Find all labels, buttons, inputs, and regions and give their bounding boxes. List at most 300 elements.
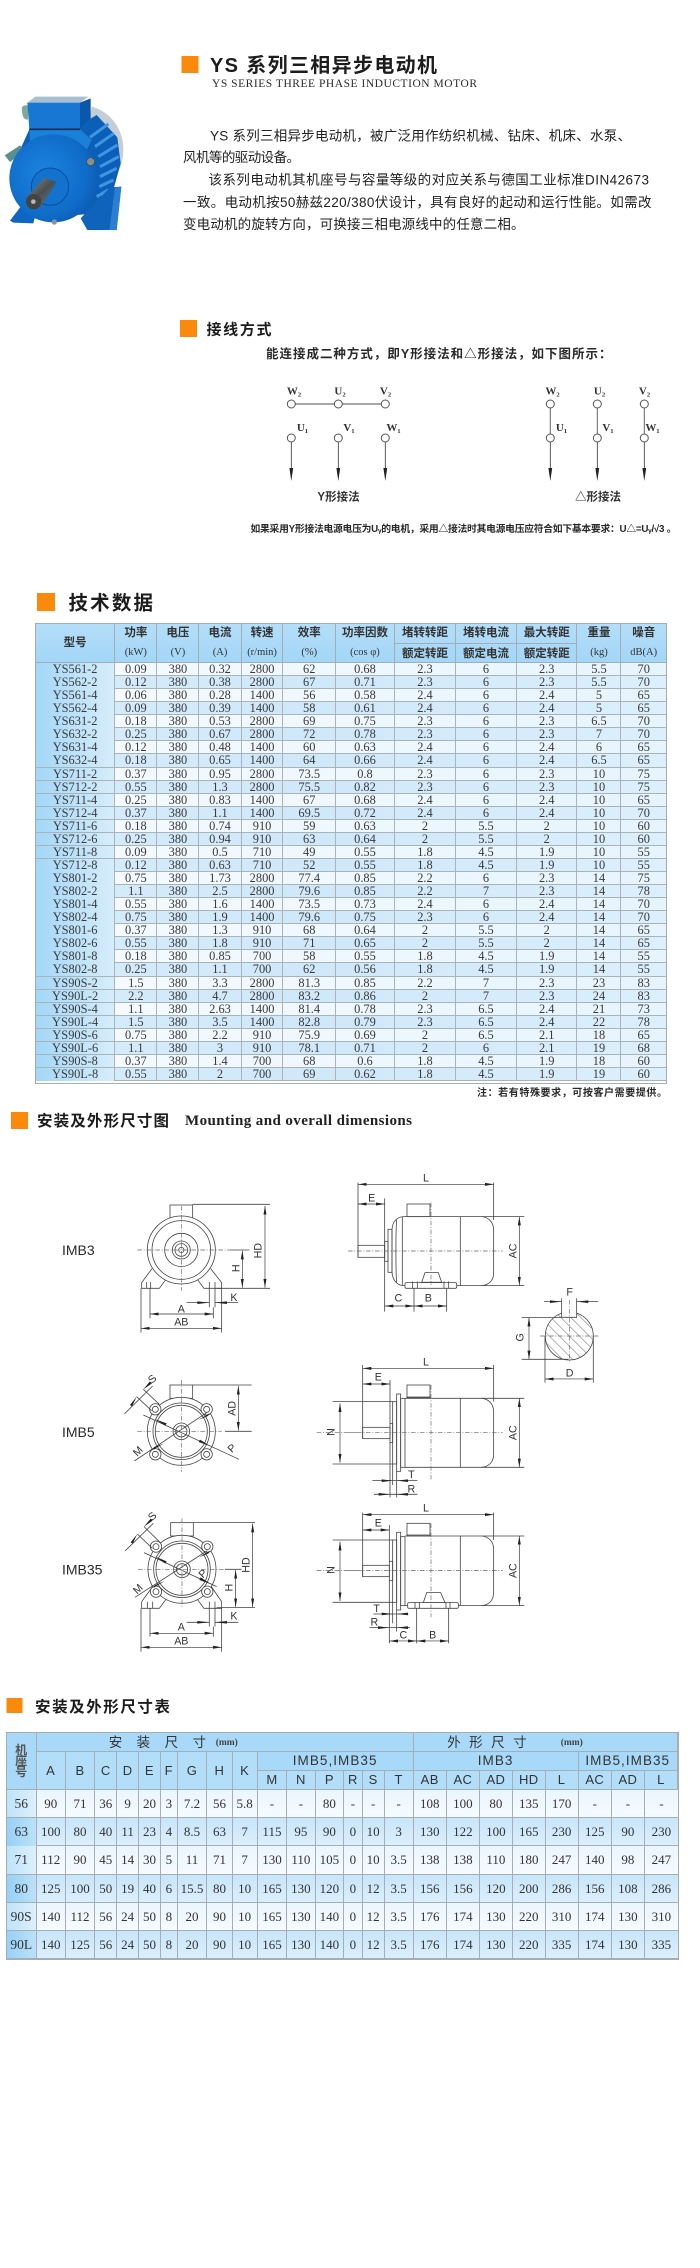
table rows: 6 (483, 701, 489, 715)
table rows: 14 (593, 923, 605, 937)
table rows: 20 (185, 1937, 198, 1952)
drawing: IMB3 side view: AC (507, 1243, 519, 1258)
table rows: 0.78 (354, 1002, 376, 1016)
table rows: 2.3 (539, 871, 554, 885)
table rows: 7 (483, 989, 489, 1003)
table header: C (101, 1763, 111, 1778)
table rows: 1.8 (417, 858, 433, 872)
table rows: 286 (552, 1881, 571, 1896)
table rows: 3 (395, 1824, 402, 1839)
table rows: 700 (253, 1067, 271, 1081)
header text: installation size: 安装尺寸 (109, 1735, 221, 1750)
table: mounting and overall sizes (6, 1732, 679, 1960)
table rows: 65 (638, 1028, 650, 1042)
table rows: 2.2 (417, 884, 433, 898)
table header: H (215, 1763, 224, 1778)
table rows: - (299, 1796, 303, 1811)
table rows: 4 (166, 1824, 172, 1839)
table rows: 75.9 (298, 1028, 320, 1042)
table rows: 1.8 (212, 936, 228, 950)
table rows: 14 (593, 897, 605, 911)
table rows: - (371, 1796, 375, 1811)
table header: AB (421, 1772, 439, 1787)
table rows: 156 (420, 1881, 440, 1896)
table rows: 10 (593, 845, 605, 859)
table rows: 56 (213, 1796, 226, 1811)
table rows: 200 (519, 1881, 538, 1896)
table rows: 380 (169, 806, 187, 820)
table rows (36, 662, 666, 1081)
drawing: IMB5 side view: N (326, 1428, 338, 1436)
table rows: 0.67 (209, 727, 231, 741)
table header: K (240, 1763, 249, 1778)
table rows: 4.5 (478, 962, 494, 976)
table rows: 73 (638, 1002, 650, 1016)
table rows: 56 (14, 1796, 28, 1811)
table rows: 1400 (250, 1002, 274, 1016)
table rows: YS562-2 (53, 675, 97, 689)
table rows: 0.6 (357, 1054, 373, 1068)
table rows: 0.32 (209, 662, 231, 676)
table rows: 40 (99, 1824, 112, 1839)
table rows: 6 (483, 753, 489, 767)
table header: (%) (301, 647, 317, 658)
table rows: 2.3 (417, 675, 433, 689)
drawing: IMB3 front view: HD (252, 1243, 264, 1258)
table rows: 80 (489, 1796, 502, 1811)
table rows: 6.5 (478, 1002, 494, 1016)
table header: E (145, 1763, 154, 1778)
table rows: 2.4 (417, 740, 433, 754)
table rows: YS712-4 (53, 806, 97, 820)
table rows: 2.4 (539, 740, 554, 754)
table rows: 24 (121, 1909, 134, 1924)
diagram: Y connection: Y形接法 (317, 490, 360, 504)
table rows: 90S (11, 1909, 32, 1924)
table rows: 2.3 (539, 766, 554, 780)
drawing: IMB35 front view: AB (174, 1636, 188, 1648)
table rows: 1.8 (417, 1054, 433, 1068)
table rows: 380 (169, 832, 187, 846)
table header: AC (585, 1772, 604, 1787)
table rows: 2 (544, 832, 550, 846)
table rows: 14 (593, 884, 605, 898)
table rows: 0.63 (354, 740, 376, 754)
drawing: IMB35 front view: IMB35 (62, 1561, 103, 1577)
table rows: 0.25 (125, 793, 147, 807)
table header: 座 (15, 1754, 27, 1768)
table rows: 0.85 (354, 871, 376, 885)
table rows: 174 (585, 1909, 604, 1924)
table rows: 380 (169, 923, 187, 937)
table rows: 2.3 (539, 714, 554, 728)
table rows: 22 (593, 1015, 605, 1029)
table rows: YS712-2 (53, 780, 97, 794)
table rows: 70 (638, 662, 650, 676)
table rows: 83 (638, 976, 650, 990)
table rows: 1400 (250, 910, 274, 924)
table header: 重量 (587, 627, 610, 639)
table rows: 80 (323, 1796, 336, 1811)
table rows: 14 (593, 962, 605, 976)
drawing: IMB35 side view: R (370, 1617, 378, 1629)
table rows: 1.3 (212, 780, 228, 794)
table rows: 0.12 (125, 740, 147, 754)
table rows: 174 (453, 1937, 473, 1952)
diagram: Y connection: W₁ (386, 422, 401, 434)
table header: S (369, 1772, 378, 1787)
table header: 堵转转距 (402, 627, 448, 639)
table rows: YS801-8 (53, 949, 97, 963)
table rows: 8.5 (184, 1824, 200, 1839)
table rows: 21 (593, 1002, 605, 1016)
table rows: 0.18 (125, 714, 147, 728)
table rows: YS90S-4 (52, 1002, 98, 1016)
table rows: 2.3 (417, 727, 433, 741)
table rows: 14 (121, 1852, 134, 1867)
table rows: 58 (303, 949, 315, 963)
table rows: 1.9 (539, 949, 554, 963)
table rows: 380 (169, 1054, 187, 1068)
table rows: 125 (41, 1881, 60, 1896)
table header: 型号 (64, 637, 87, 649)
table header: (V) (171, 647, 185, 658)
drawing: IMB3 front view (62, 1204, 270, 1333)
table rows: 108 (618, 1881, 638, 1896)
table rows: 1.8 (417, 845, 433, 859)
table rows: YS712-8 (53, 858, 97, 872)
table rows: 380 (169, 989, 187, 1003)
table header: AD (618, 1772, 637, 1787)
table rows: 23 (143, 1824, 156, 1839)
table rows: 56 (303, 688, 315, 702)
icon: technical data heading marker (37, 593, 55, 611)
table rows: 2800 (250, 884, 274, 898)
table rows: 0.68 (354, 662, 376, 676)
table rows: 1.8 (417, 949, 433, 963)
table rows: 3.5 (390, 1852, 407, 1867)
table rows: 2800 (250, 727, 274, 741)
table rows: 380 (169, 884, 187, 898)
table rows: 380 (169, 766, 187, 780)
table rows: 90 (213, 1909, 226, 1924)
table rows: 78.1 (298, 1041, 320, 1055)
table rows: 0.39 (209, 701, 231, 715)
table rows: 14 (593, 910, 605, 924)
table rows: 55 (638, 845, 650, 859)
table rows: 380 (169, 662, 187, 676)
table rows: 11 (121, 1824, 134, 1839)
table header (7, 1733, 678, 1790)
drawing: IMB35 side view: N (326, 1566, 338, 1574)
table rows: 70 (638, 910, 650, 924)
table rows: 52 (303, 858, 315, 872)
table rows: 0.75 (125, 910, 147, 924)
table rows: 2.3 (539, 884, 554, 898)
drawing: IMB5 side view: AC (507, 1425, 519, 1440)
drawing: shaft section: D (566, 1367, 574, 1379)
table rows: 55 (638, 962, 650, 976)
table rows: 0.85 (209, 949, 231, 963)
diagram: delta connection (545, 386, 660, 504)
table rows: 0 (350, 1852, 356, 1867)
diagram: delta connection: △形接法 (575, 490, 621, 504)
table rows: 95 (294, 1824, 307, 1839)
table rows: 5.5 (478, 819, 494, 833)
table rows: 1400 (250, 897, 274, 911)
table rows: 156 (585, 1881, 604, 1896)
table rows: 100 (41, 1824, 60, 1839)
table rows: 2800 (250, 714, 274, 728)
table header: L (558, 1772, 565, 1787)
table rows: 2.3 (539, 989, 554, 1003)
table rows: YS801-2 (53, 871, 97, 885)
table rows: YS712-6 (53, 832, 97, 846)
table header: 电压 (166, 627, 189, 639)
drawing: IMB35 side view: E (375, 1517, 382, 1529)
table header: L (657, 1772, 665, 1787)
drawing: IMB35 front view (62, 1510, 255, 1652)
table rows: 1.1 (128, 884, 144, 898)
table rows: 380 (169, 936, 187, 950)
table rows: 6 (483, 1041, 489, 1055)
table rows: 3.5 (212, 1015, 228, 1029)
diagram: delta connection: W₂ (545, 386, 560, 398)
drawing: IMB35 front view: H (223, 1584, 235, 1591)
table rows: 165 (519, 1824, 538, 1839)
table rows: 19 (593, 1067, 605, 1081)
table rows: 380 (169, 688, 187, 702)
icon: wiring heading marker (180, 320, 197, 337)
table rows: 64 (303, 753, 315, 767)
table rows: - (351, 1796, 355, 1811)
diagram: Y connection: V₁ (343, 422, 355, 434)
table rows: 3.3 (212, 976, 228, 990)
table rows: 12 (367, 1909, 380, 1924)
table rows: 0.55 (125, 780, 147, 794)
table rows: 122 (453, 1824, 473, 1839)
table rows: 2.4 (539, 753, 554, 767)
table rows: 2.4 (417, 806, 433, 820)
table rows: 18 (593, 1028, 605, 1042)
table rows: 140 (585, 1852, 604, 1867)
table rows: YS90L-4 (52, 1015, 98, 1029)
table rows: 0.55 (125, 936, 147, 950)
table rows: 18 (593, 1054, 605, 1068)
table rows: 112 (70, 1909, 90, 1924)
table rows: 2.2 (128, 989, 144, 1003)
table header: G (187, 1763, 197, 1778)
table rows: 2.3 (539, 675, 554, 689)
table header: D (123, 1763, 133, 1778)
table rows: 90 (621, 1824, 634, 1839)
table rows: 0.55 (354, 858, 376, 872)
diagram: delta connection: V₁ (602, 422, 614, 434)
table rows: 2.2 (212, 1028, 228, 1042)
table rows: 2800 (250, 675, 274, 689)
table rows: 180 (519, 1852, 538, 1867)
drawing: IMB35 front view: M (131, 1582, 146, 1597)
table rows: 125 (70, 1937, 90, 1952)
table rows: 335 (552, 1937, 571, 1952)
table rows: 80 (213, 1881, 226, 1896)
table rows: 2800 (250, 976, 274, 990)
table rows: 10 (593, 780, 605, 794)
table rows: 6.5 (591, 714, 607, 728)
table rows: 1400 (250, 806, 274, 820)
table rows: 75 (638, 780, 650, 794)
table rows: 90 (323, 1824, 336, 1839)
diagram: Y connection: U₁ (297, 422, 308, 434)
drawing: IMB3 front view: IMB3 (62, 1242, 95, 1258)
table header: IMB5,IMB35 (585, 1753, 670, 1768)
table header: 号 (15, 1765, 27, 1779)
table rows: 65 (638, 753, 650, 767)
table rows: 0.09 (125, 701, 147, 715)
table rows: 2.3 (417, 910, 433, 924)
table rows: 1400 (250, 793, 274, 807)
table rows: 2.1 (539, 1041, 554, 1055)
table rows: 100 (70, 1881, 90, 1896)
table rows: 6 (483, 780, 489, 794)
table rows: 6 (166, 1881, 172, 1896)
heading: mounting and overall dimensions (37, 1111, 412, 1130)
table rows: 6 (483, 662, 489, 676)
table rows: 0.62 (354, 1067, 376, 1081)
drawing: IMB35 side view (317, 1502, 524, 1643)
table rows: 700 (253, 1054, 271, 1068)
table rows: 910 (253, 1028, 271, 1042)
table rows: YS802-2 (53, 884, 97, 898)
table rows: 380 (169, 976, 187, 990)
table header: (A) (213, 647, 227, 658)
table rows: 910 (253, 1041, 271, 1055)
table rows: 60 (638, 1054, 650, 1068)
table rows: 9 (124, 1796, 131, 1811)
table rows: 10 (238, 1937, 251, 1952)
table rows: 380 (169, 701, 187, 715)
table rows: 3.5 (390, 1909, 407, 1924)
table rows: 68 (638, 1041, 650, 1055)
table rows: 3 (217, 1041, 223, 1055)
table rows: 4.5 (478, 1067, 494, 1081)
table rows: 1400 (250, 740, 274, 754)
table rows (7, 1790, 678, 1959)
table rows: 0.69 (354, 1028, 376, 1042)
drawing: IMB35 side view: C (399, 1630, 407, 1642)
table rows: 120 (486, 1881, 506, 1896)
table rows: 79.6 (298, 910, 320, 924)
table rows: 14 (593, 871, 605, 885)
table rows: 2.3 (539, 727, 554, 741)
table rows: 1.9 (539, 1067, 554, 1081)
table rows: 0.55 (354, 845, 376, 859)
table rows: 0 (350, 1824, 356, 1839)
table rows: 1.1 (128, 1002, 144, 1016)
table rows: 0 (350, 1881, 356, 1896)
table rows: 98 (621, 1852, 634, 1867)
table rows: 380 (169, 753, 187, 767)
table rows: YS711-8 (53, 845, 97, 859)
table rows: 220 (519, 1909, 538, 1924)
table rows: 0.53 (209, 714, 231, 728)
table rows: 1.9 (539, 962, 554, 976)
table rows: 65 (638, 793, 650, 807)
table rows: 130 (486, 1937, 506, 1952)
table rows: 50 (99, 1881, 112, 1896)
table rows: 83 (638, 989, 650, 1003)
table rows: - (626, 1796, 630, 1811)
table rows: 2.4 (539, 806, 554, 820)
table rows: 0.66 (354, 753, 376, 767)
table rows: 0.25 (125, 727, 147, 741)
table rows: 2.1 (539, 1028, 554, 1042)
drawing: IMB5 front view: IMB5 (62, 1424, 95, 1440)
table rows: 78 (638, 1015, 650, 1029)
table rows: 130 (618, 1909, 638, 1924)
table rows: 112 (41, 1852, 60, 1867)
table rows: 36 (99, 1796, 112, 1811)
table rows: 1.1 (212, 962, 228, 976)
table rows: 62 (303, 962, 315, 976)
table rows: 55 (638, 949, 650, 963)
table rows: 286 (652, 1881, 671, 1896)
drawing: shaft section: G (515, 1333, 527, 1341)
drawing: IMB3 side view: C (394, 1292, 402, 1304)
table rows: 100 (486, 1824, 506, 1839)
table rows: 6 (483, 793, 489, 807)
table rows: 5.5 (591, 662, 607, 676)
drawing: IMB35 front view: K (230, 1611, 238, 1623)
table rows: 0.95 (209, 766, 231, 780)
table rows: 0.37 (125, 766, 147, 780)
table rows: 40 (143, 1881, 156, 1896)
table rows: 2800 (250, 662, 274, 676)
table rows: 2.4 (539, 1002, 554, 1016)
table rows: 70 (638, 806, 650, 820)
table rows: 0.64 (354, 832, 376, 846)
table rows: 65 (638, 701, 650, 715)
table rows: 2 (422, 936, 428, 950)
table rows: 1.9 (539, 858, 554, 872)
drawing: IMB5 front view: P (226, 1442, 239, 1455)
table rows: 310 (652, 1909, 671, 1924)
drawing: IMB5 side view: T (408, 1469, 415, 1481)
table rows: - (270, 1796, 274, 1811)
drawing: IMB35 side view: B (429, 1630, 436, 1642)
table rows: 1400 (250, 701, 274, 715)
table rows: 5 (596, 688, 602, 702)
table rows: 138 (453, 1852, 473, 1867)
table rows: 63 (213, 1824, 226, 1839)
table rows: 1.8 (417, 1067, 433, 1081)
table rows: 30 (143, 1852, 156, 1867)
table rows: 0.86 (354, 989, 376, 1003)
table rows: 6.5 (591, 753, 607, 767)
table rows: 140 (320, 1937, 339, 1952)
table rows: 65 (638, 740, 650, 754)
text block: introduction: YS 系列三相异步电动机，被广泛用作纺织机械、钻床、机床、水泵、 (210, 128, 631, 144)
drawing: IMB35 side view: L (423, 1502, 429, 1514)
table rows: 2 (422, 923, 428, 937)
table rows: YS561-2 (53, 662, 97, 676)
table rows: 73.5 (298, 897, 320, 911)
table header: (kW) (125, 647, 147, 658)
table rows: 120 (320, 1881, 339, 1896)
table rows: 7 (483, 976, 489, 990)
table rows: 2.4 (539, 897, 554, 911)
header unit: outline: (mm) (561, 1738, 583, 1748)
